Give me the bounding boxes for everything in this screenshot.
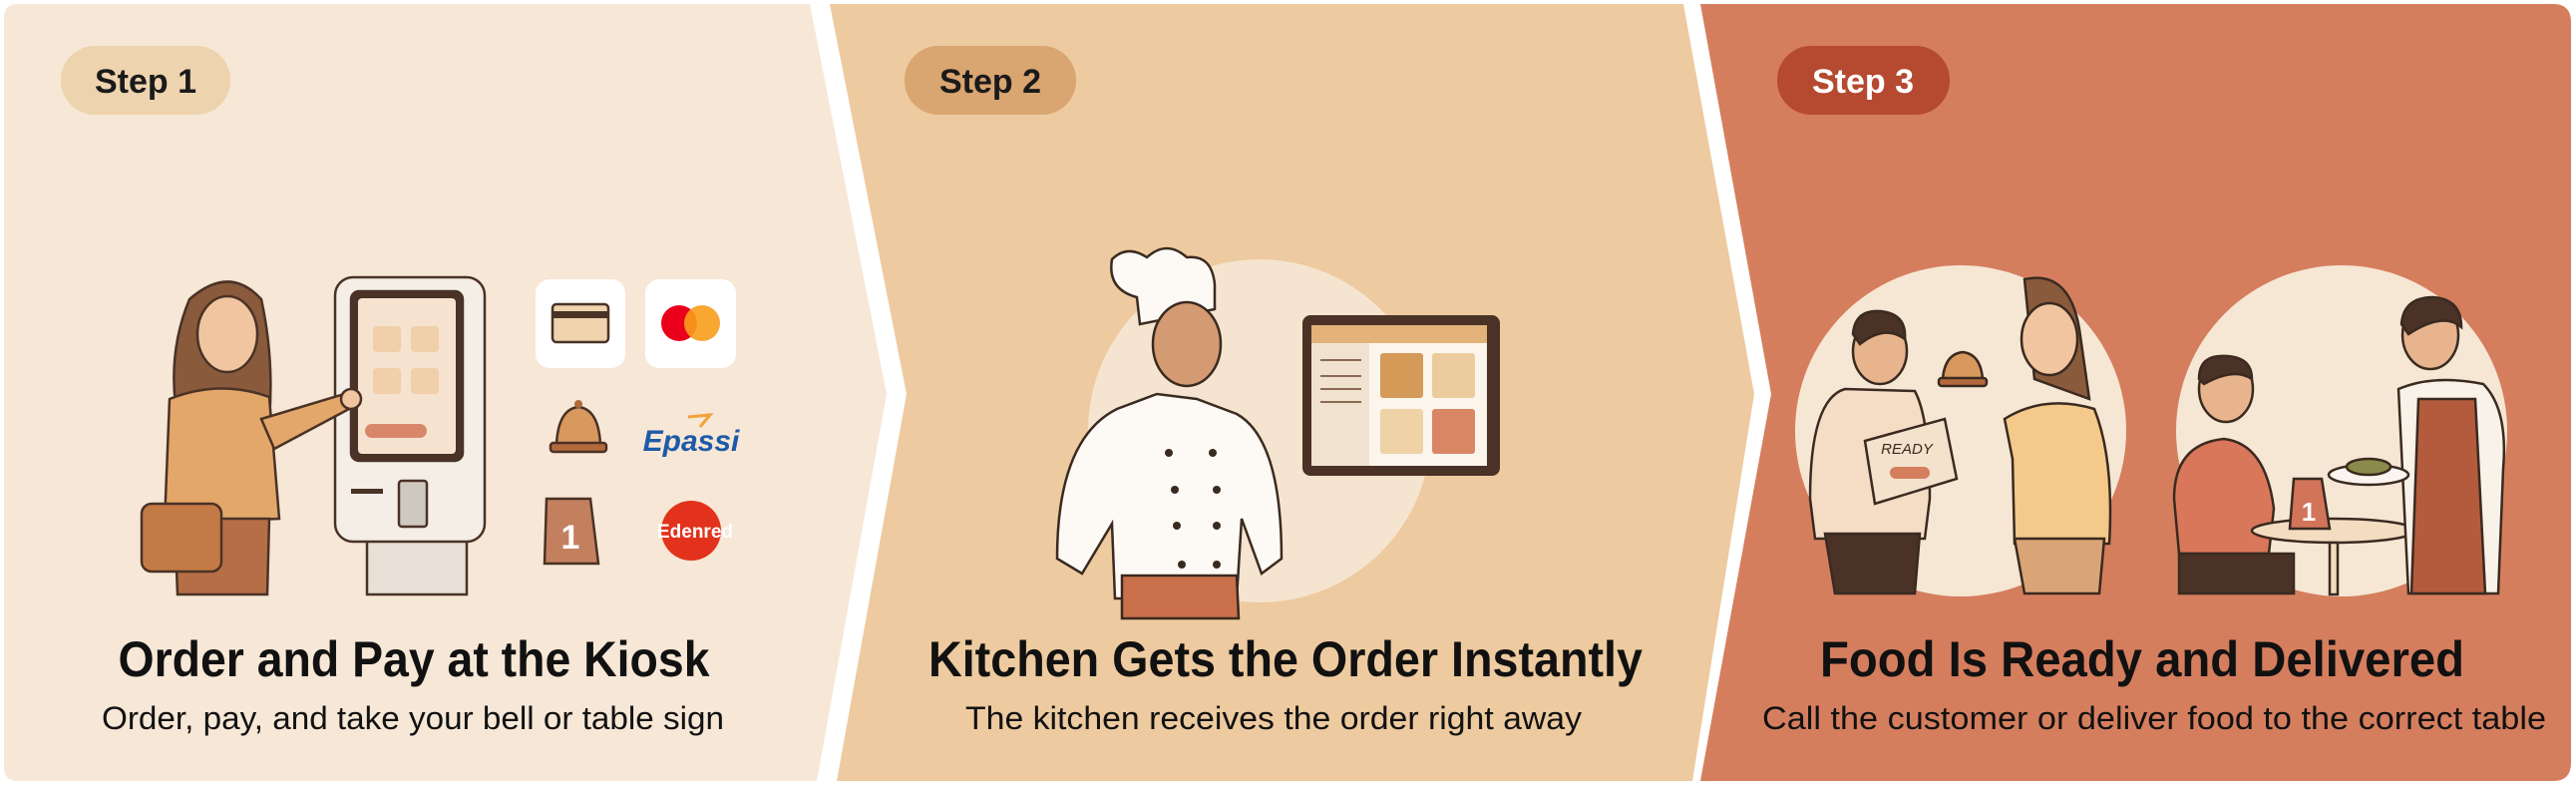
step 1 pill: Step 1 [95, 63, 196, 101]
kiosk [367, 539, 467, 594]
step 3 pill: Step 3 [1812, 63, 1914, 101]
step 1 pill [61, 46, 230, 115]
step 2 pill [905, 46, 1076, 115]
step 3 pill [1777, 46, 1950, 115]
logo: Edenred [657, 501, 733, 561]
illustration: woman at kiosk [142, 277, 485, 594]
illustration: delivering to table [2174, 265, 2507, 596]
title 1: Order and Pay at the Kiosk [118, 631, 710, 687]
panel: step 3 [1700, 4, 2571, 781]
woman [174, 281, 270, 429]
background circle [1088, 259, 1431, 602]
subtitle 2: The kitchen receives the order right away [965, 700, 1582, 736]
illustration: chef [1057, 248, 1282, 618]
icon: table sign 1 [545, 499, 598, 564]
illustration: delivering to table: 1 [2302, 497, 2316, 527]
panel: step 2 [830, 4, 1754, 781]
illustration: calling customer: READY [1881, 441, 1934, 458]
icon: mastercard [645, 279, 736, 368]
icon: table sign 1: 1 [561, 519, 579, 557]
icon: card [536, 279, 625, 368]
title 3: Food Is Ready and Delivered [1820, 631, 2464, 687]
title 2: Kitchen Gets the Order Instantly [928, 631, 1643, 687]
icon: bell [551, 400, 606, 452]
subtitle 3: Call the customer or deliver food to the correct table [1762, 700, 2546, 736]
step 2 pill: Step 2 [939, 63, 1041, 101]
illustration: calling customer [1795, 265, 2126, 596]
logo: Edenred: Edenred [657, 522, 733, 543]
panel: step 1 [4, 4, 887, 781]
illustration: tablet [1302, 315, 1500, 476]
logo: Epassi: Epassi [643, 425, 740, 458]
subtitle 1: Order, pay, and take your bell or table sign [102, 700, 724, 736]
